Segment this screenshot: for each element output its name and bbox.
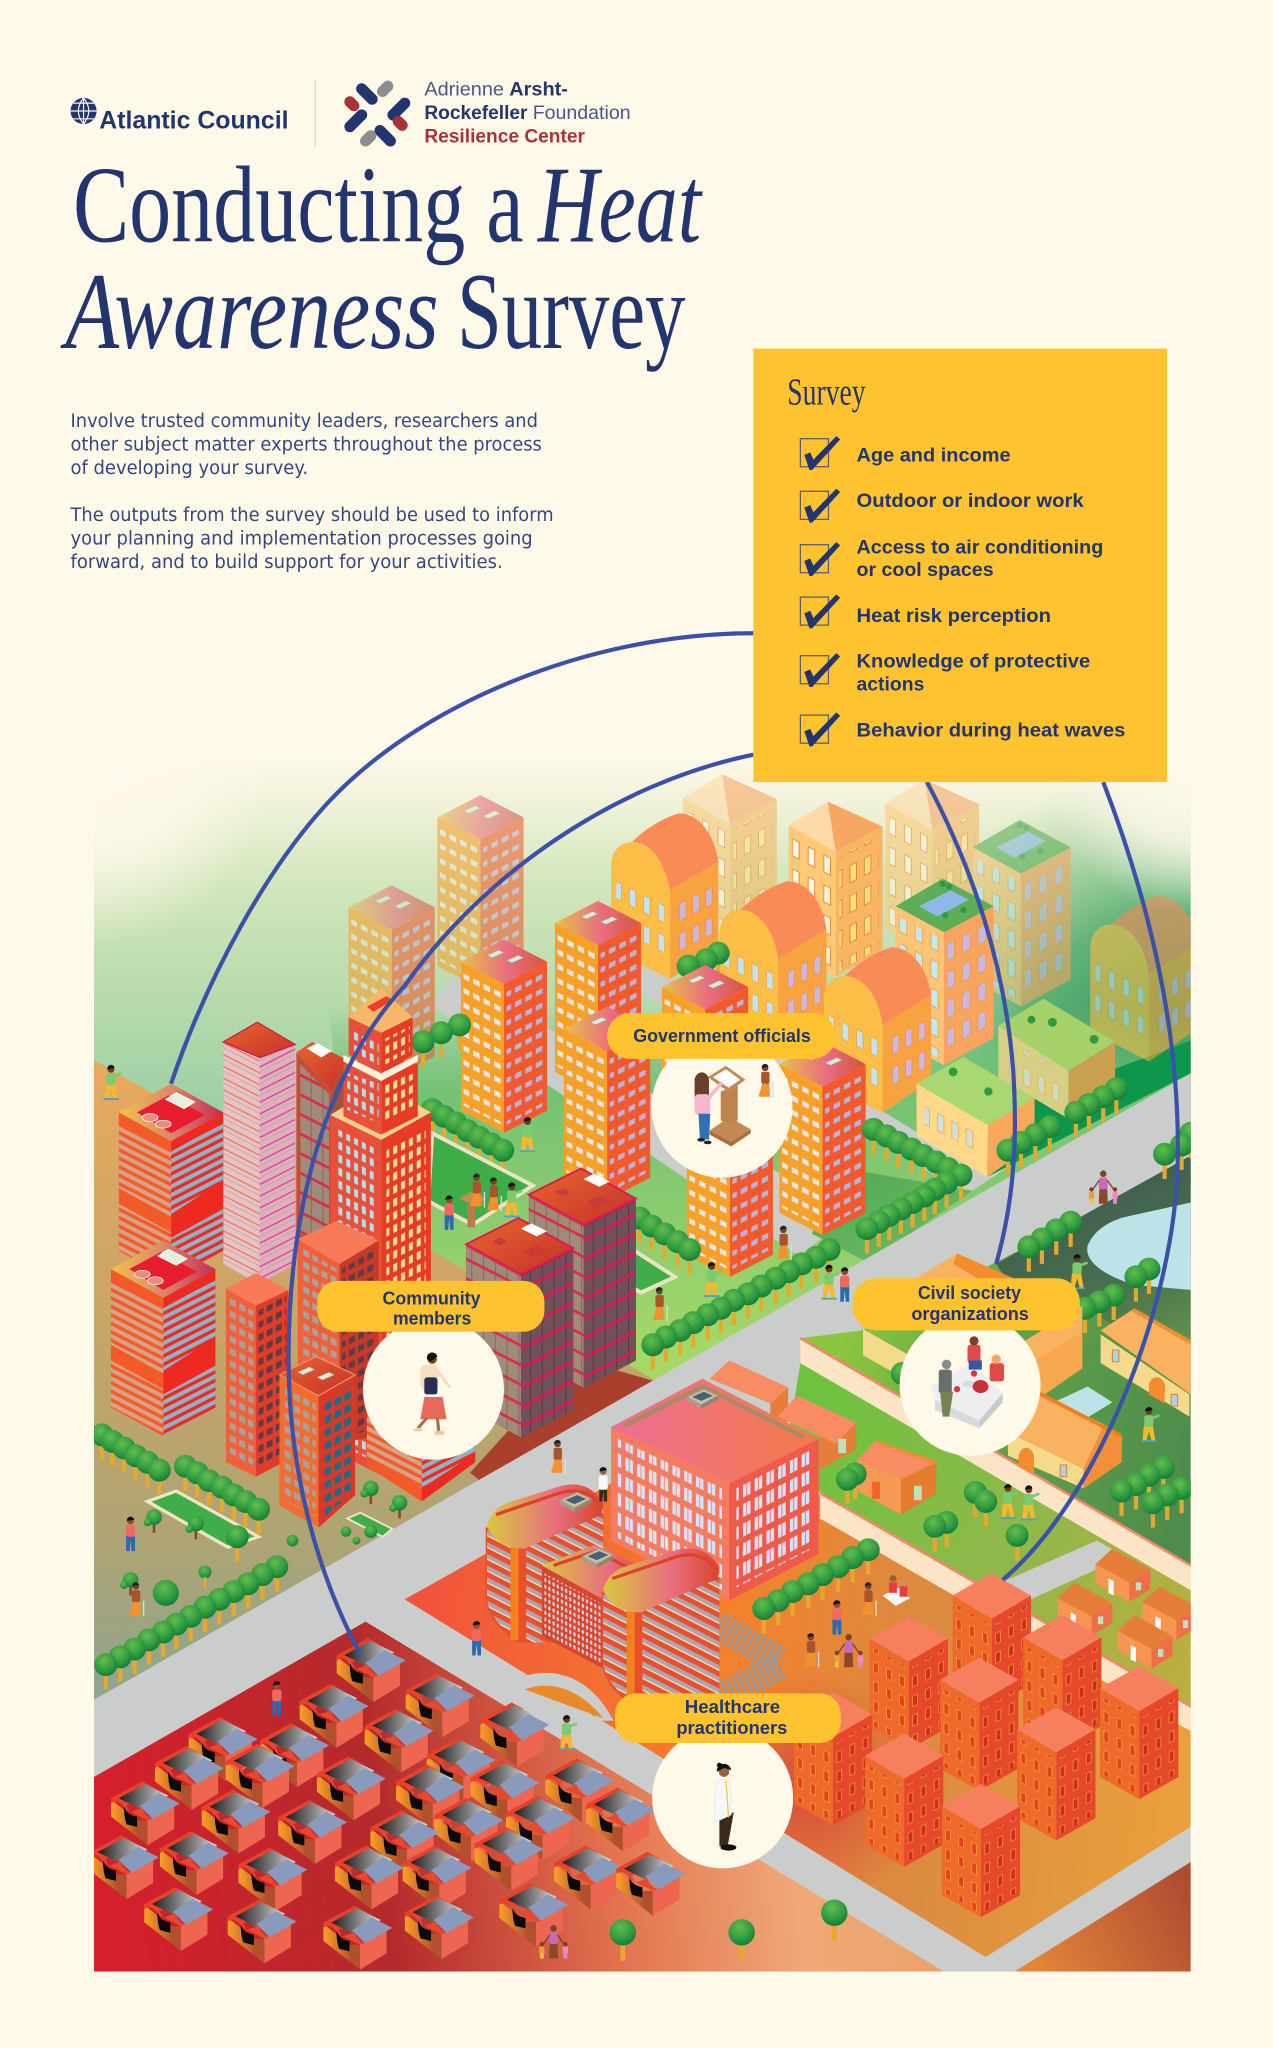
- figure: people at food table: [931, 1336, 1004, 1428]
- checklist items: [857, 445, 1126, 742]
- title: Heat: [536, 144, 703, 266]
- main road surface: [94, 1073, 1191, 1971]
- logo text: Adrienne Arsht-Rockefeller Foundation Resilience Center: [424, 78, 631, 147]
- checklist items: Age and income: [857, 445, 1011, 467]
- sky gradient backdrop: [94, 755, 1191, 1186]
- panel heading: Survey: [787, 372, 866, 414]
- checklist items: Behavior during heat waves: [857, 720, 1126, 742]
- dark green strip behind low blocks: [988, 1041, 1191, 1176]
- ground: lower right corner: [1014, 1862, 1191, 1971]
- checklist items: Access to air conditioning: [857, 536, 1103, 558]
- title: Conducting a: [73, 144, 524, 266]
- pill label: civil society organizations: [853, 1278, 1080, 1330]
- pill label: government officials: [607, 1013, 836, 1059]
- ground: left tan district: [94, 1060, 659, 1700]
- rounded building left: [486, 1484, 603, 1642]
- domed yellow building 2: [719, 881, 826, 1016]
- small houses lower right: [1058, 1548, 1197, 1669]
- crimson tower front: [466, 1218, 573, 1437]
- striped tower back left: [119, 1084, 223, 1280]
- logo text: Adrienne Arsht-Rockefeller Foundation Resilience Center: Adrienne: [424, 78, 504, 100]
- dark park with pond: [996, 1155, 1191, 1423]
- checkbox icons: [800, 436, 840, 746]
- header divider: [314, 80, 316, 146]
- striped tower front left: [111, 1240, 215, 1436]
- orange house in green: [858, 1441, 936, 1515]
- title: Survey: [457, 250, 686, 372]
- domed yellow building 3: [824, 947, 931, 1113]
- skyscraper: pink striped tall: [223, 1022, 295, 1285]
- intro text: your planning and implementation processes going: [71, 528, 533, 549]
- small lawn right of towers: [636, 1250, 679, 1295]
- brick tower middle: [298, 1221, 379, 1443]
- green lawn patch with trees: [812, 1166, 973, 1263]
- logo text: Adrienne Arsht-Rockefeller Foundation Resilience Center: Resilience Center: [424, 125, 585, 147]
- callout: community members: [363, 1319, 504, 1460]
- ground: upper green neighbourhood: [800, 1163, 1191, 1565]
- pill label: community members: [317, 1281, 544, 1332]
- intro text: The outputs from the survey should be used to inform: [70, 505, 554, 526]
- ground: hospital and apartments district: [405, 1482, 1191, 1957]
- logo text: Adrienne Arsht-Rockefeller Foundation Resilience Center: Arsht-: [509, 78, 568, 100]
- logo text: Adrienne Arsht-Rockefeller Foundation Resilience Center: Rockefeller: [424, 102, 528, 124]
- civil society buildings: [863, 1253, 1082, 1404]
- figure: official at podium: [695, 1064, 773, 1146]
- orange tower right of circle: [779, 1042, 866, 1235]
- checklist items: or cool spaces: [857, 559, 994, 581]
- pill label: healthcare practitioners: Healthcare: [685, 1696, 780, 1717]
- checklist items: Outdoor or indoor work: [857, 490, 1084, 512]
- hospital main block: [611, 1379, 819, 1601]
- orange tower behind circle: [686, 1156, 773, 1277]
- informal settlement shacks: [90, 1638, 685, 1970]
- pill label: healthcare practitioners: [615, 1693, 841, 1743]
- domed yellow building 1: [611, 813, 718, 979]
- pill label: healthcare practitioners: practitioners: [676, 1717, 787, 1738]
- ground: informal settlement: [94, 1622, 944, 1971]
- lower terrace house: [1008, 1394, 1122, 1489]
- checklist items: Heat risk perception: [857, 605, 1051, 627]
- solar unit on rounded roof: [560, 1492, 591, 1512]
- pill label: community members: members: [393, 1308, 471, 1329]
- logo text: Adrienne Arsht-Rockefeller Foundation Resilience Center: Foundation: [533, 102, 631, 124]
- panel: survey checklist: [753, 349, 1167, 782]
- green district trees: [836, 1456, 1193, 1560]
- logo: Atlantic Council: Atlantic Council: [99, 108, 289, 135]
- small tree cluster by tower: [676, 942, 730, 976]
- intro text: other subject matter experts throughout the process: [71, 434, 542, 455]
- figure: doctor: [714, 1763, 736, 1851]
- ground: brown patch beside towers: [470, 1370, 653, 1480]
- small people across the city: [103, 1065, 1159, 1958]
- title: Awareness: [60, 250, 439, 372]
- logo: Resilience Center mark: [350, 86, 405, 141]
- beige walkway strips: [800, 1338, 1191, 1731]
- figure: walking woman: [413, 1352, 450, 1435]
- bottom standalone trees: [610, 1900, 848, 1961]
- title: [60, 144, 703, 372]
- park bushes: [120, 1481, 407, 1606]
- apartment cluster: [794, 1573, 1178, 1917]
- orange tower small: [662, 964, 748, 1070]
- checklist items: Knowledge of protective: [857, 651, 1090, 673]
- entrance arch: [516, 1673, 614, 1721]
- pill label: community members: Community: [383, 1287, 481, 1308]
- low green roof block left: [917, 1057, 1035, 1177]
- small grey side road: [960, 1540, 1112, 1618]
- long tree row along main road: [641, 1238, 841, 1370]
- isometric city illustration: [90, 755, 1202, 1971]
- green roof tower: [896, 879, 994, 1065]
- lattice building: [542, 1545, 653, 1669]
- plaza lawn with podium group: [428, 1117, 538, 1230]
- callout: civil society organizations: [900, 1315, 1041, 1456]
- intro text: Involve trusted community leaders, researchers and: [71, 411, 538, 432]
- tree rows upper district: [412, 1013, 1202, 1333]
- orange tower center: [461, 940, 547, 1133]
- gabled tower: [789, 802, 883, 977]
- ground: green between beige strips: [789, 1363, 1191, 1706]
- teal window tower: [279, 1357, 355, 1528]
- lower left tree rows: [90, 1423, 288, 1689]
- skyscraper: back orange: [296, 1042, 347, 1253]
- checklist items: actions: [857, 674, 925, 696]
- lower road band: [860, 1826, 1191, 1972]
- right terrace house: [1101, 1310, 1191, 1417]
- upper cross roads: [431, 957, 1012, 1256]
- orange tower by officials: [564, 1007, 650, 1200]
- pill label: government officials: Government officials: [633, 1025, 811, 1046]
- crimson tower back: [529, 1169, 636, 1388]
- back row faded buildings: [349, 774, 1197, 1078]
- intro text: forward, and to build support for your activities.: [71, 552, 503, 573]
- pill label: civil society organizations: Civil society: [918, 1282, 1022, 1303]
- intro text: of developing your survey.: [71, 458, 308, 479]
- ground: upper green district: [326, 992, 1191, 1383]
- lower left lawns: [148, 1491, 392, 1547]
- tree row by hospital: [752, 1538, 880, 1633]
- brick tower lower left: [226, 1273, 289, 1477]
- low green roof block right: [998, 999, 1115, 1119]
- intro text: [70, 411, 554, 573]
- art deco tower: [330, 988, 431, 1475]
- blue connector arcs: [171, 633, 1178, 1654]
- logo: Atlantic Council: [71, 98, 289, 135]
- pill label: civil society organizations: organizations: [911, 1303, 1029, 1324]
- rounded building right: [602, 1548, 719, 1706]
- striped low block under circle: [367, 1384, 475, 1501]
- neighbourhood houses: [710, 1360, 856, 1470]
- fence: [700, 1626, 779, 1708]
- orange tower back: [555, 901, 641, 1094]
- callout: healthcare practitioners: [652, 1727, 793, 1868]
- callout: government officials: [652, 1037, 793, 1178]
